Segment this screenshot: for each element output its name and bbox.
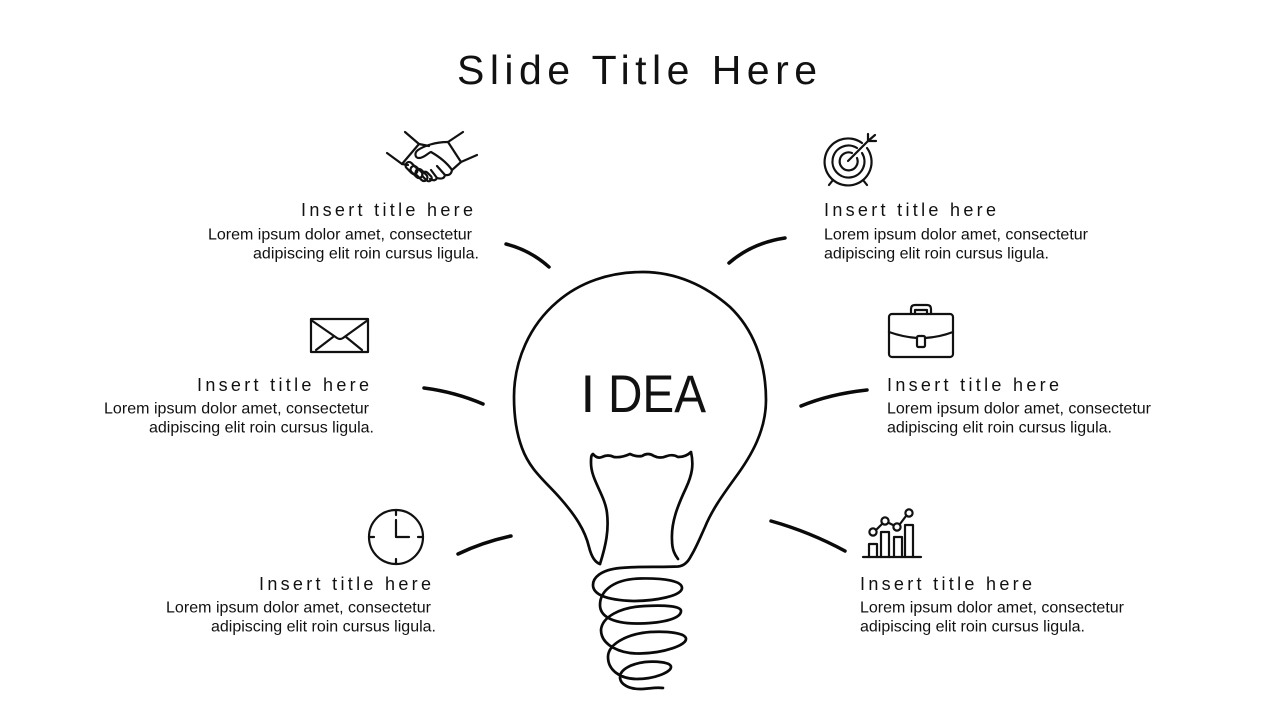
icon: clock: [369, 510, 423, 564]
icon: handshake: [387, 132, 477, 183]
body text: [208, 226, 479, 262]
heading: Insert title here: [301, 200, 473, 220]
heading: Insert title here: [197, 375, 369, 395]
block: top left: [208, 132, 479, 262]
ray: bottom left: [458, 536, 511, 554]
block: top right: [824, 134, 1089, 262]
idea label: I: [580, 365, 595, 424]
title: Slide Title Here: [457, 47, 817, 93]
block: middle right: [887, 305, 1152, 436]
body text: Lorem ipsum dolor amet, consectetur: [166, 600, 432, 616]
heading: Insert title here: [860, 574, 1032, 594]
icon: bar chart with trend line: [863, 509, 921, 557]
body text: [824, 226, 1089, 262]
body text: adipiscing elit roin cursus ligula.: [253, 246, 479, 262]
body text: [860, 600, 1125, 636]
idea label: DEA: [608, 365, 707, 424]
body text: Lorem ipsum dolor amet, consectetur: [208, 226, 473, 244]
body text: [104, 400, 374, 436]
body text: adipiscing elit roin cursus ligula.: [887, 420, 1112, 436]
body text: [166, 600, 436, 636]
ray: top right: [729, 238, 785, 263]
block: bottom right: [860, 509, 1125, 636]
body text: adipiscing elit roin cursus ligula.: [860, 618, 1085, 636]
light bulb illustration: [514, 272, 766, 689]
body text: adipiscing elit roin cursus ligula.: [211, 618, 436, 636]
ray: middle right: [801, 390, 867, 406]
body text: Lorem ipsum dolor amet, consectetur: [860, 600, 1125, 616]
body text: Lorem ipsum dolor amet, consectetur: [104, 400, 370, 418]
heading: Insert title here: [887, 375, 1059, 395]
icon: envelope: [311, 319, 368, 352]
body text: adipiscing elit roin cursus ligula.: [824, 246, 1049, 262]
heading: Insert title here: [824, 200, 996, 220]
bulb filament: [591, 452, 692, 564]
ray: middle left: [424, 388, 483, 404]
ray: top left: [506, 244, 549, 267]
icon: briefcase: [889, 305, 953, 357]
body text: adipiscing elit roin cursus ligula.: [149, 420, 374, 436]
block: middle left: [104, 319, 374, 436]
heading: Insert title here: [259, 574, 431, 594]
body text: [887, 400, 1152, 436]
block: bottom left: [166, 510, 436, 636]
body text: Lorem ipsum dolor amet, consectetur: [887, 400, 1152, 418]
ray: bottom right: [771, 521, 845, 551]
bulb outline and screw spiral: [514, 272, 766, 689]
body text: Lorem ipsum dolor amet, consectetur: [824, 226, 1089, 244]
icon: target with arrow: [825, 134, 876, 185]
